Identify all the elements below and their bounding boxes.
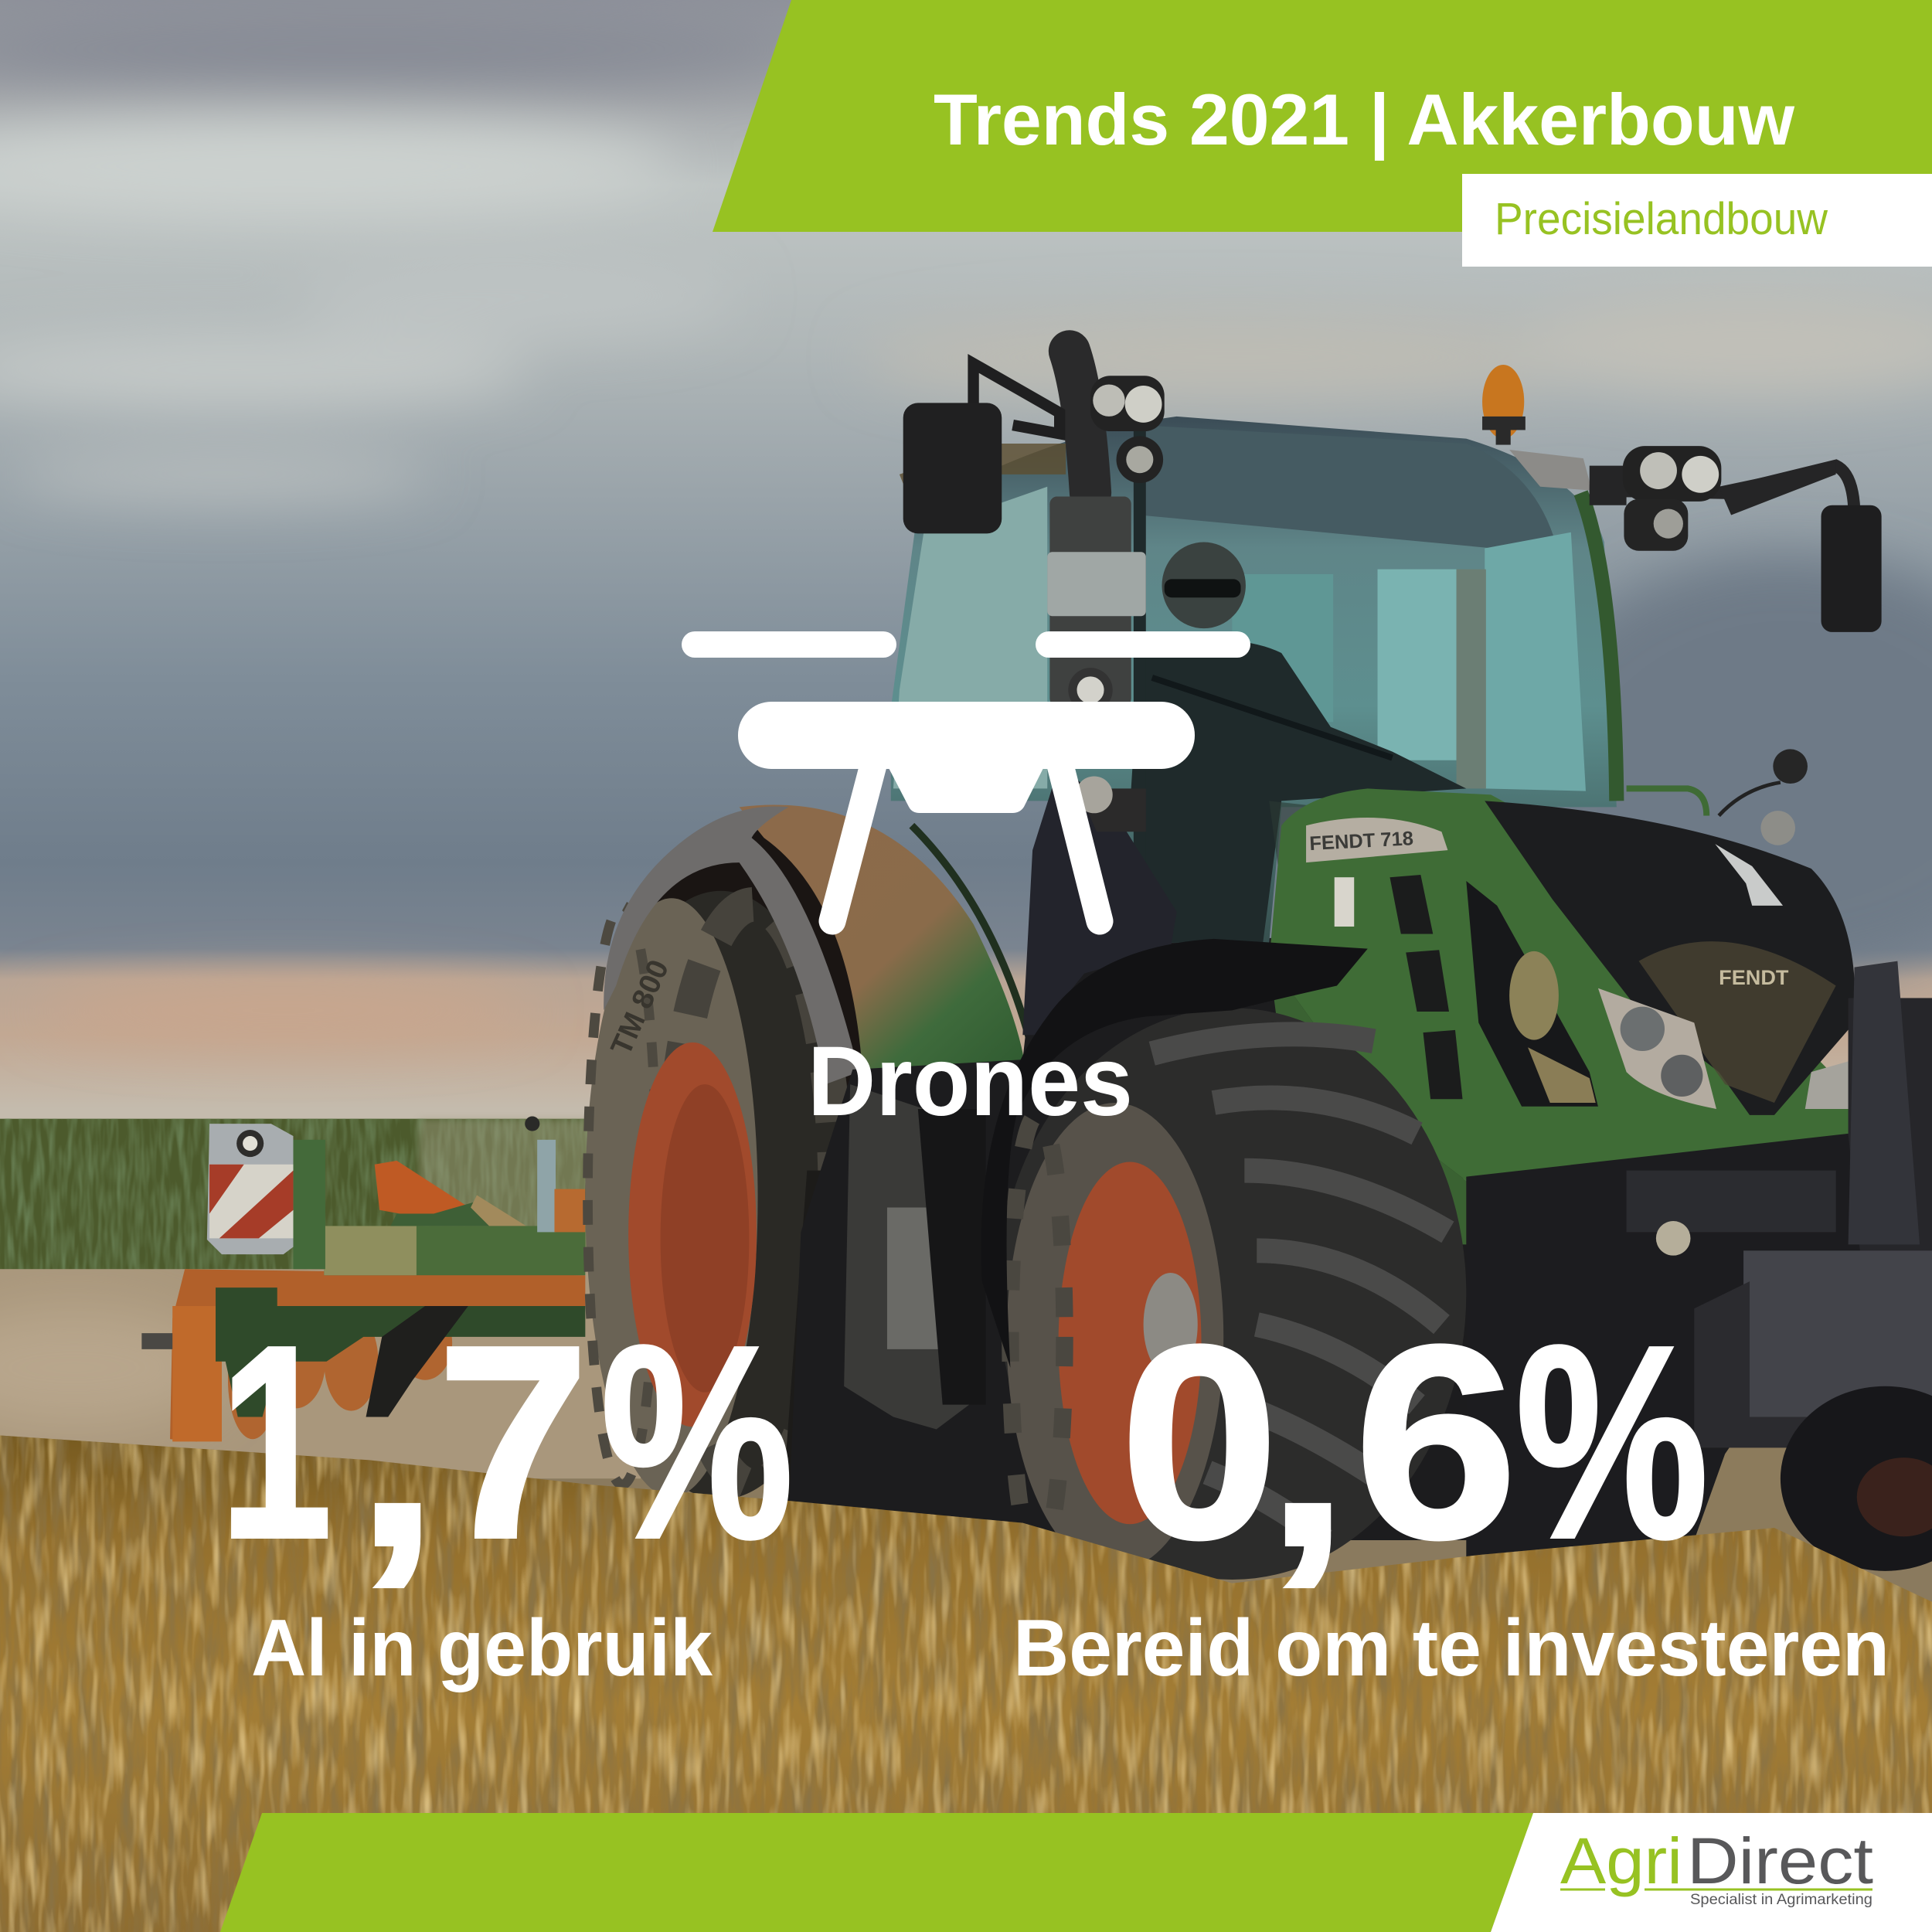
rear wheel: TM 800 [604,955,675,1060]
rear wheel arch interior [604,819,887,1232]
exhaust and lights [900,351,1882,845]
subtitle box: Precisielandbouw [1495,194,1828,244]
logo: AgriDirect: Agri [1560,1825,1682,1897]
front wheel [998,1008,1466,1580]
title: Trends 2021 | Akkerbouw [934,79,1795,161]
stat: 1,7% [219,1289,794,1603]
footer band [220,1813,1533,1932]
rear fender [604,804,1035,1084]
tractor body backing [788,937,1472,1540]
front hood [1269,788,1855,1244]
stat: 0,6%: 6 [1354,1289,1518,1596]
rear wheel [585,891,856,1499]
logo: AgriDirect: Specialist in Agrimarketing [1690,1892,1872,1908]
stat: 1,7%: 1 [219,1289,332,1596]
cab glass and interior [891,417,1706,943]
front hood: FENDT 718 [1309,828,1414,855]
stat label: Al in gebruik: Al in gebruik [251,1604,713,1693]
top banner [713,0,1932,232]
heading: Drones: Drones [808,1026,1133,1137]
front chassis [1466,961,1932,1571]
field [0,1119,641,1478]
stat: 0,6%: , [1266,1301,1349,1603]
logo: AgriDirect [1560,1825,1873,1908]
central side box [844,1084,986,1429]
icon: drone [682,631,1250,921]
stat: 1,7%: % [600,1289,794,1596]
stat: 0,6%: % [1515,1289,1709,1596]
front fender [981,939,1368,1368]
subtitle box [1462,174,1932,267]
front hood: FENDT [1719,965,1789,989]
stat: 0,6% [1120,1289,1709,1603]
footer logo panel [1491,1813,1932,1932]
stubble foreground [0,1429,1932,1932]
logo: AgriDirect: Direct [1687,1825,1873,1897]
central tower [1022,764,1177,1035]
stat label: Bereid om te investeren: Bereid om te investeren [1013,1604,1889,1693]
stat: 1,7%: 7 [437,1289,590,1596]
implement [141,1117,585,1441]
cab lower shell [1269,801,1393,961]
stat: 1,7%: , [355,1301,439,1603]
stat: 0,6%: 0 [1120,1289,1279,1596]
